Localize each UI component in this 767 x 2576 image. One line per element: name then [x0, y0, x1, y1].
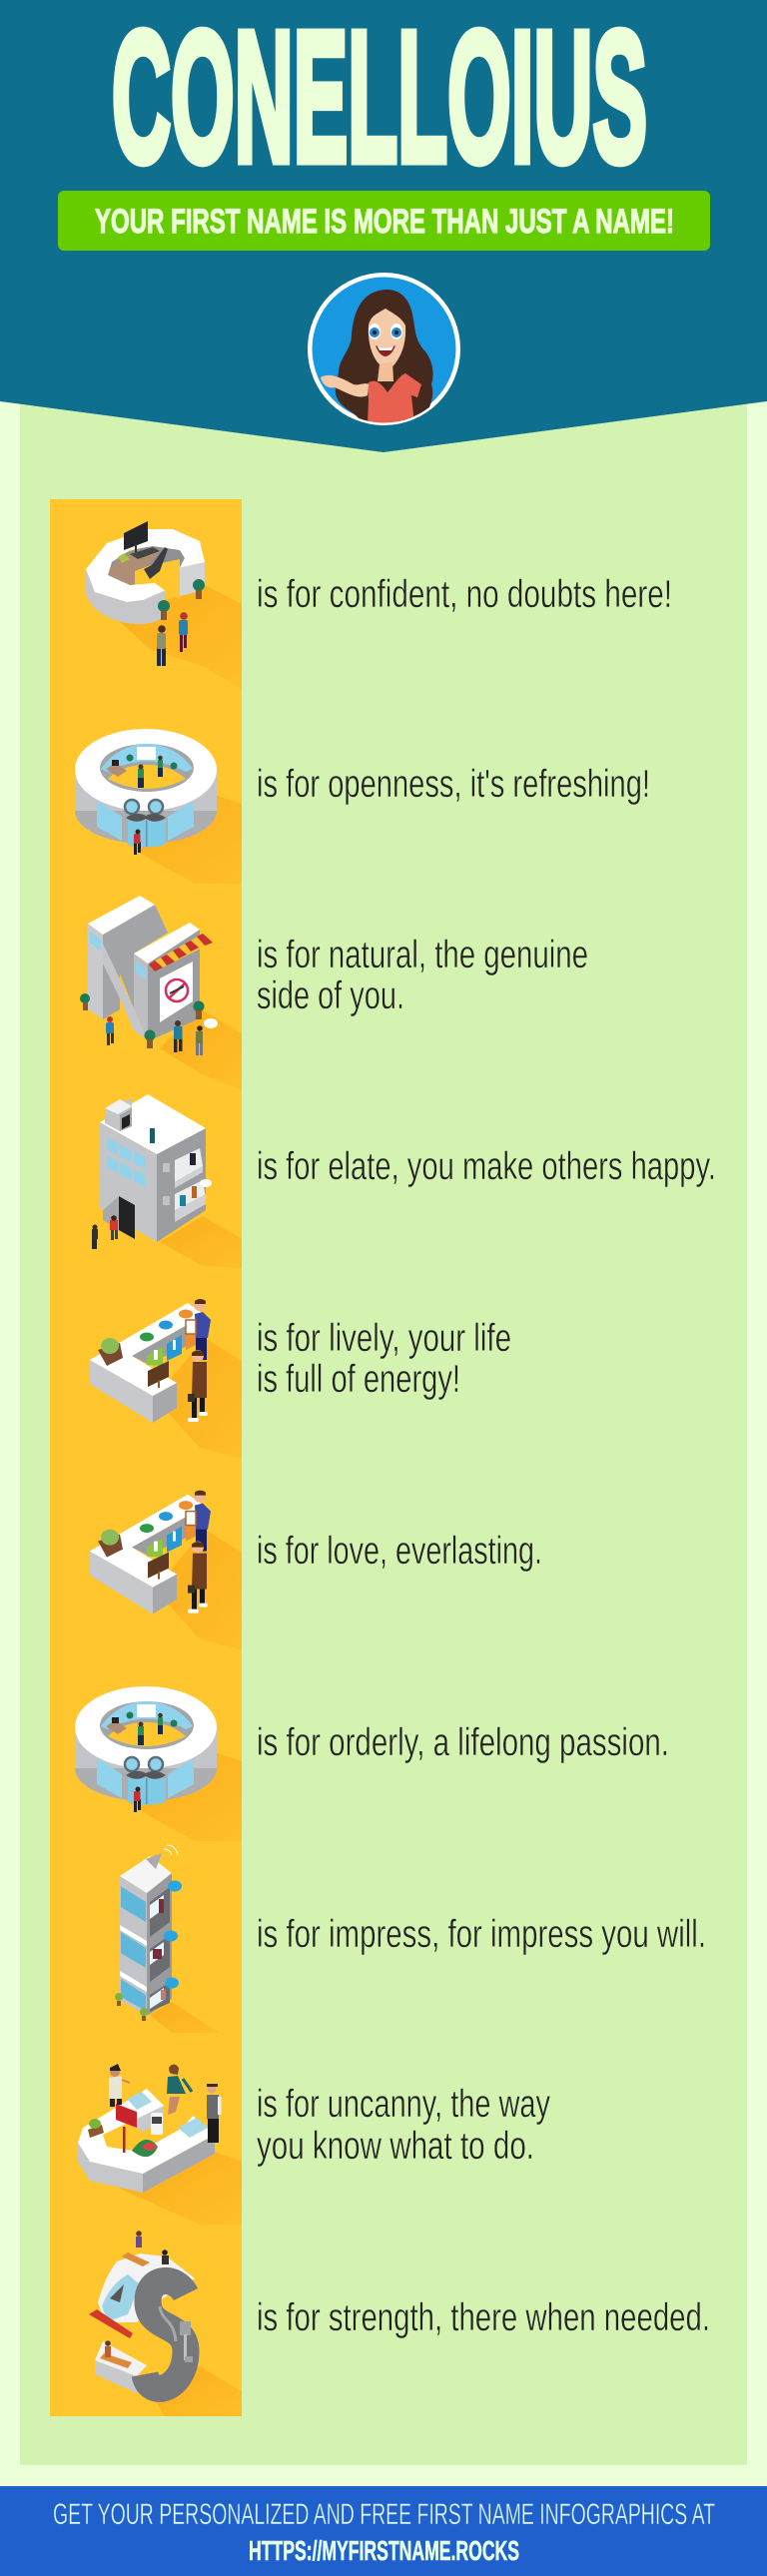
- text: letter N: [257, 934, 588, 1017]
- footer: HTTPS://MYFIRSTNAME.ROCKS: [249, 2535, 519, 2566]
- icon: letter U counter: [78, 2064, 242, 2225]
- windows: [107, 1137, 145, 1187]
- plants: [158, 579, 205, 612]
- monitor: [124, 521, 148, 550]
- inner wall: [107, 546, 185, 585]
- lower platform: [95, 2360, 137, 2393]
- text: letter U: is for uncanny, the way: [257, 2083, 550, 2126]
- windows: [97, 801, 122, 841]
- waiter right: [207, 2084, 222, 2143]
- icon: letter E building: [92, 1094, 242, 1268]
- glasses and moustache: [125, 800, 139, 814]
- text: letter L lively: is for lively, your life: [257, 1317, 511, 1360]
- no smoking poster: [160, 962, 193, 1022]
- text: letter N: side of you.: [257, 974, 404, 1017]
- icon: letter L recycling counter: [90, 1299, 242, 1459]
- desk: [108, 548, 163, 585]
- header banner: [0, 0, 767, 452]
- chair: [144, 547, 168, 579]
- icon: letter L counter, second: [90, 1491, 242, 1650]
- icon: letter S building: [89, 2231, 242, 2416]
- text: letter L love: is for love, everlasting.: [257, 1530, 542, 1573]
- text: letter N: is for natural, the genuine: [257, 934, 588, 976]
- icon: letter I tower: [115, 1845, 220, 2033]
- woman left: [109, 2064, 130, 2107]
- icon: letter C reception desk: [86, 521, 242, 689]
- text: letter U: you know what to do.: [257, 2125, 534, 2168]
- portrait: [308, 273, 460, 425]
- glass inserts: [127, 2092, 152, 2110]
- woman middle: [167, 2065, 192, 2115]
- balconies: [175, 1148, 203, 1182]
- outer wall: [86, 569, 165, 624]
- text: letter L lively: is full of energy!: [257, 1358, 460, 1401]
- counter front: [120, 2104, 164, 2132]
- white top: [86, 529, 205, 602]
- S shape: [145, 2280, 186, 2388]
- yellow illustration strip: [50, 499, 242, 2416]
- icon: letter O ring, second: [75, 1686, 242, 1841]
- text: letter L lively: [257, 1317, 511, 1401]
- icon: letter N building: [80, 896, 242, 1090]
- man in blue shirt: [186, 1299, 211, 1360]
- people: [157, 625, 166, 666]
- subtitle pill: [58, 191, 710, 251]
- red sign: [123, 2127, 126, 2153]
- icon: letter O ring building: [75, 729, 242, 884]
- man in brown jacket: [188, 1350, 208, 1422]
- footer: [0, 2486, 767, 2576]
- content panel: [20, 379, 747, 2465]
- awning: [89, 2309, 133, 2338]
- right stub end: [180, 562, 205, 596]
- upper white body: [98, 2254, 195, 2322]
- text: letter U: [257, 2083, 550, 2168]
- awning: [149, 934, 213, 971]
